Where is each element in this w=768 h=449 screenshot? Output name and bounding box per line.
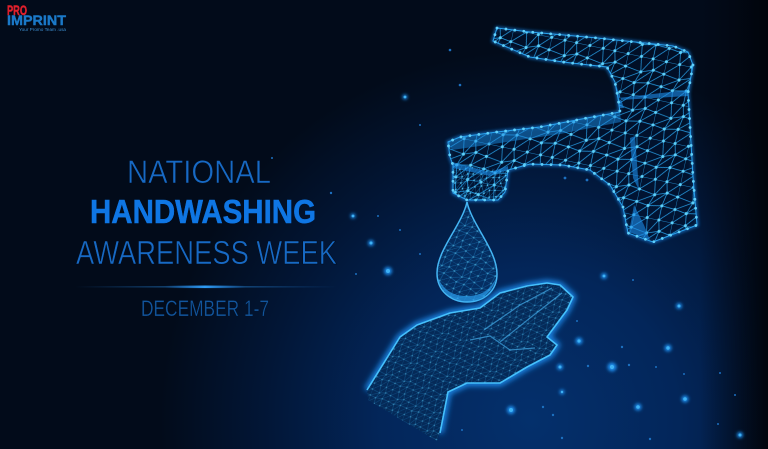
- icon: faucet: [448, 28, 697, 242]
- logo: Pro Imprint: [7, 2, 67, 32]
- date: DECEMBER 1-7: [141, 296, 269, 321]
- faucet bright ridges: [452, 82, 688, 240]
- glowing divider: [75, 286, 337, 288]
- logo: Pro Imprint: PRO: [7, 2, 27, 18]
- hand outline: [367, 283, 573, 433]
- title: Awareness Week: AWARENESS WEEK: [76, 234, 337, 271]
- icon: water drop: [437, 202, 497, 302]
- hand body: [367, 283, 573, 441]
- faucet outline: [448, 28, 697, 242]
- hand finger creases: [470, 288, 562, 350]
- logo: Pro Imprint: Your Promo Team .usa: [19, 27, 67, 32]
- particles: [271, 49, 743, 440]
- title: Handwashing: HANDWASHING: [90, 193, 316, 230]
- hand outer glow: [367, 283, 573, 433]
- icon: hand: [367, 283, 573, 441]
- faucet aerator mesh: [453, 165, 508, 200]
- faucet spout highlight: [448, 112, 621, 150]
- title: National: NATIONAL: [127, 154, 271, 190]
- logo: Pro Imprint: IMPRINT: [7, 12, 66, 28]
